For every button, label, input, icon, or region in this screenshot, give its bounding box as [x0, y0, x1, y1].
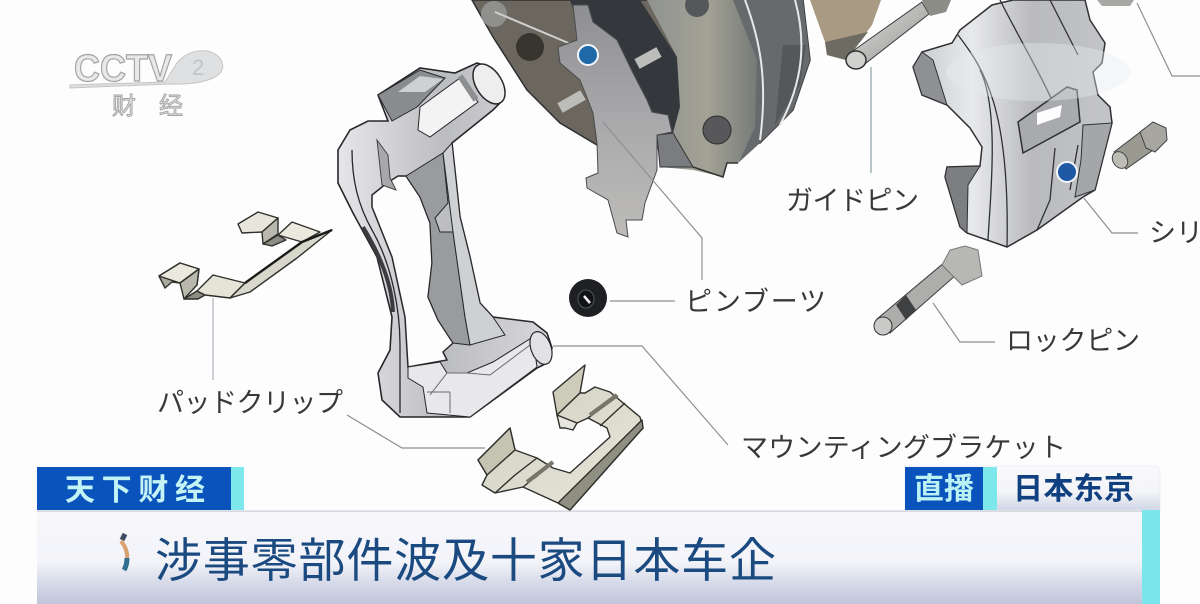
headline text: 涉事零部件波及十家日本车企 [155, 534, 776, 587]
lower third: headline bar [37, 510, 1160, 604]
label: lock pin: ロックピン [1006, 326, 1140, 356]
bracket opening [372, 176, 453, 367]
CCTV logo watermark [70, 48, 223, 120]
CCTV logo watermark: 财经 [112, 93, 183, 120]
rubber boot [569, 279, 607, 317]
marker: shim [578, 45, 598, 65]
left pad clip [159, 212, 332, 299]
label: pin boot: ピンブーツ [685, 287, 826, 317]
lower third: location tag: 直播 [914, 473, 974, 506]
top right watermark [946, 43, 1130, 101]
top right part [1097, 0, 1134, 6]
label: pad clip: パッドクリップ [157, 388, 343, 418]
caliper [913, 0, 1112, 247]
lower third: location tag [905, 466, 1160, 510]
brake disc [472, 0, 810, 163]
lower pad clip [478, 365, 643, 510]
CCTV logo watermark: 2 [192, 55, 204, 80]
label: mounting bracket: マウンティングブラケット [741, 433, 1066, 463]
lower third: location tag: 日本东京 [1013, 473, 1134, 506]
CCTV logo watermark: CCTV [74, 48, 173, 90]
lower third: program tag: 天下财经 [65, 474, 205, 507]
bolt [1109, 122, 1167, 171]
icon: ticker mark [121, 534, 127, 570]
mounting bracket [338, 58, 556, 417]
lower third: program tag [37, 467, 244, 510]
brown pad and guide pin [810, 0, 951, 69]
marker: caliper [1057, 162, 1077, 182]
brake pad [647, 0, 757, 177]
lock pin [874, 246, 982, 335]
leader lines [213, 3, 1200, 448]
shim plate [558, 5, 672, 237]
label: guide pin: ガイドピン [786, 186, 919, 216]
